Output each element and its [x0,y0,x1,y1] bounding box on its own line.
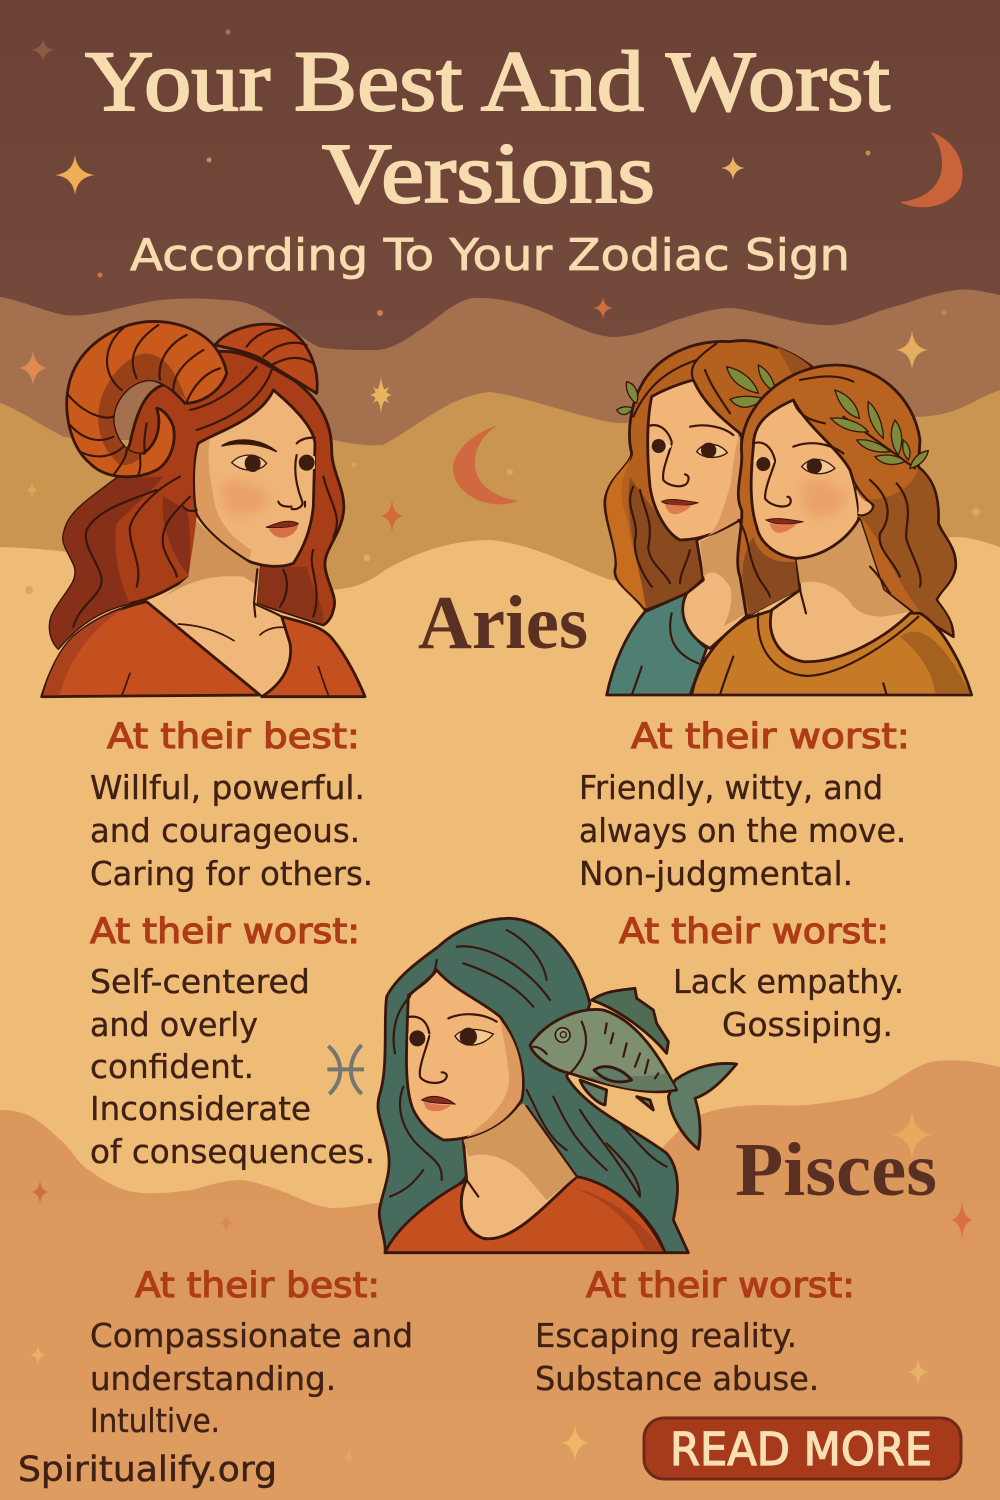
Gemini worst traits: Lack empathy. [673,962,904,1001]
Aries best traits: Caring for others. [90,854,373,893]
Pisces worst traits: At their worst: [586,1266,855,1306]
Pisces face details [407,1014,497,1111]
Aries label: Aries [418,581,588,665]
Aries worst traits: and overly [90,1005,258,1044]
illustration: Gemini twins with laurel wreaths [605,341,972,695]
Gemini best traits: Friendly, witty, and [579,768,883,807]
Pisces best traits [90,1266,413,1440]
Aries best traits: Willful, powerful. [90,768,365,807]
brand name: Spiritualify.org [18,1450,277,1490]
moon: top right [900,132,963,207]
Pisces best traits: At their best: [135,1266,380,1306]
title: Versions [322,125,655,221]
Gemini worst traits: Gossiping. [722,1005,893,1044]
laurel wreath [831,390,928,468]
Aries face details [183,438,315,538]
Pisces worst traits: Escaping reality. [535,1316,797,1355]
Gemini worst traits [619,912,904,1044]
ram horn [67,321,313,477]
moon: middle [453,425,518,504]
Pisces worst traits: Substance abuse. [535,1359,819,1398]
read more button: READ MORE [670,1423,932,1476]
Aries worst traits: At their worst: [90,912,360,952]
illustration: Pisces woman with fish [378,918,737,1253]
Aries best traits: At their best: [107,717,360,757]
Gemini best traits [579,717,910,893]
Aries best traits: and courageous. [90,811,360,850]
front twin [692,365,972,695]
Aries worst traits: of consequences. [90,1132,375,1171]
Aries worst traits [90,912,375,1171]
subtitle: According To Your Zodiac Sign [130,230,850,281]
Aries worst traits: Inconsiderate [90,1089,311,1128]
Gemini best traits: At their worst: [631,717,910,757]
title: Your Best And Worst [85,33,890,129]
Aries worst traits: confident. [90,1047,254,1086]
fish [530,988,737,1149]
icon: Pisces symbol [327,1045,364,1094]
Aries worst traits: Self-centered [90,962,310,1001]
title [85,33,890,221]
Aries best traits [90,717,373,893]
Pisces best traits: understanding. [90,1359,336,1398]
Pisces best traits: Compassionate and [90,1316,413,1355]
back twin [605,341,812,695]
Pisces best traits: Intultive. [90,1401,220,1440]
illustration: Aries woman with ram horns [42,321,365,697]
Gemini worst traits: At their worst: [619,912,889,952]
Gemini best traits: Non-judgmental. [579,854,853,893]
Pisces label: Pisces [735,1128,937,1212]
Pisces worst traits [535,1266,855,1398]
Gemini best traits: always on the move. [579,811,906,850]
